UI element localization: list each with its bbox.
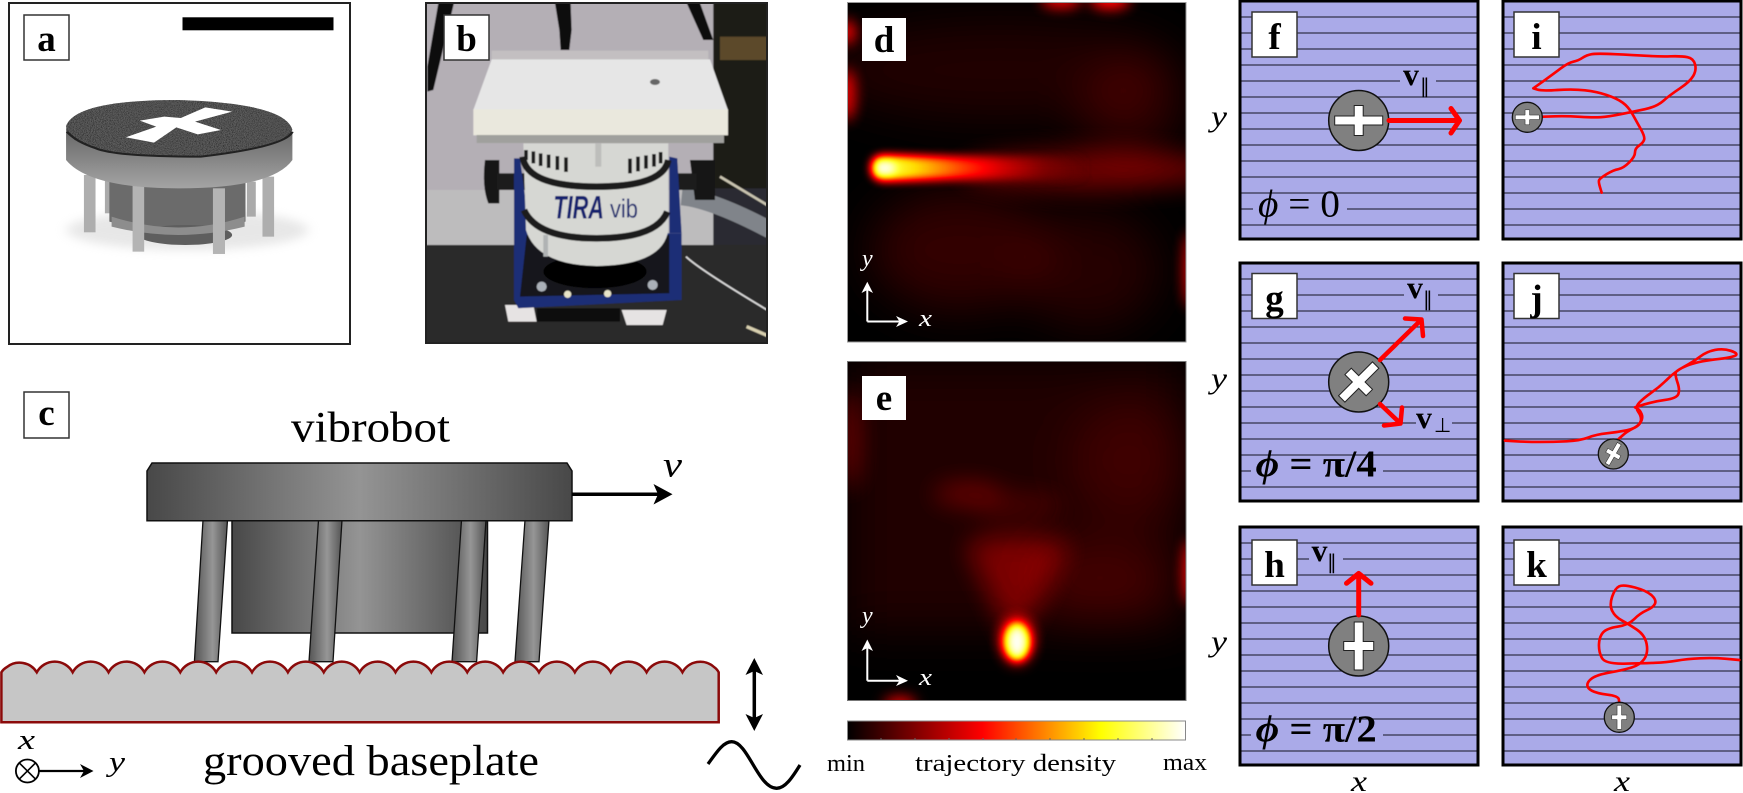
label a: [24, 15, 69, 60]
label g: g: [1265, 278, 1284, 320]
panel f: phi = 0: [1239, 1, 1479, 239]
velocity label h: v: [1312, 532, 1328, 568]
velocity label g parallel: v: [1407, 269, 1423, 305]
axes e: x: [918, 665, 932, 691]
vibrobot heading: vibrobot: [291, 405, 450, 452]
vibrobot body: [147, 463, 572, 662]
label b: [444, 15, 489, 60]
colour bar labels: trajectory density: [915, 751, 1116, 777]
arrow h: [1346, 574, 1371, 615]
robot k: [1604, 702, 1634, 732]
trajectory i: [1533, 54, 1696, 193]
label j: [1514, 274, 1559, 320]
axis labels y: y: [1207, 362, 1228, 395]
panel g: phi = pi/4: [1239, 263, 1479, 501]
velocity label g parallel: [1407, 269, 1433, 311]
axis labels y: y: [1207, 625, 1228, 658]
velocity label f: ∥: [1420, 74, 1430, 98]
label e: [862, 376, 906, 420]
phi label h: ϕ = π/2: [1256, 709, 1377, 751]
velocity label f: [1403, 56, 1430, 98]
coordinate axes x y: x: [17, 725, 36, 756]
logo text: [554, 196, 638, 219]
logo text: TIRA: [553, 189, 604, 225]
arrow: vertical vibration: [746, 658, 763, 731]
panel c: schematic of vibrobot on baseplate: [1, 392, 800, 788]
axes e: [860, 603, 932, 691]
panel k: trajectory: [1502, 527, 1742, 765]
velocity label g perpendicular: v: [1416, 399, 1432, 435]
panel b: photo of shaker setup: [426, 3, 770, 345]
trajectory k: [1587, 586, 1739, 703]
coordinate axes x y: y: [105, 747, 126, 778]
label d: [862, 18, 906, 61]
label h: h: [1264, 545, 1285, 586]
scale bar: [182, 17, 334, 30]
label k: k: [1526, 545, 1547, 586]
velocity label f: v: [1403, 56, 1419, 92]
robot j: [1598, 439, 1628, 469]
label f: f: [1268, 17, 1281, 58]
arrow g parallel: [1380, 318, 1423, 360]
axis labels y: y: [1207, 100, 1228, 133]
panel a: photo of vibrobot: [9, 3, 350, 344]
robot g: [1329, 352, 1389, 412]
label b: b: [456, 19, 477, 60]
velocity label h: ∥: [1327, 550, 1337, 574]
panel j: trajectory: [1502, 263, 1742, 501]
panel e: heat map: [841, 361, 1195, 711]
colour bar labels: max: [1163, 750, 1207, 776]
label i: [1514, 12, 1559, 58]
axes e: y: [860, 603, 873, 629]
robot f: [1329, 90, 1389, 150]
label i: i: [1531, 17, 1542, 58]
phi label g: ϕ = π/4: [1256, 444, 1377, 486]
label e: e: [876, 378, 892, 419]
icon: sine wave: [708, 742, 800, 788]
arrow g perpendicular: [1380, 404, 1402, 426]
logo text: vib: [610, 194, 638, 224]
arrow: velocity v: v: [663, 445, 682, 485]
label c: c: [38, 393, 55, 434]
panel h: phi = pi/2: [1239, 527, 1479, 765]
velocity label g perpendicular: ⊥: [1434, 413, 1451, 437]
label a: a: [37, 19, 56, 60]
colour bar labels: [827, 750, 1207, 777]
panel d: heat map: [847, 2, 1186, 342]
velocity label g parallel: ∥: [1423, 287, 1433, 311]
axes d: [860, 246, 932, 332]
axis labels y: [1207, 100, 1228, 658]
robot i: [1512, 102, 1542, 132]
label c: [24, 392, 69, 438]
arrow: velocity v: [572, 445, 682, 504]
grooved baseplate shape: [1, 662, 719, 722]
velocity label g perpendicular: [1416, 399, 1451, 437]
axis labels x: [1350, 765, 1631, 793]
velocity label h: [1312, 532, 1337, 574]
axes d: x: [918, 306, 932, 332]
label h: [1252, 540, 1297, 586]
colour bar legend: [827, 721, 1207, 777]
phi label f: ϕ = 0: [1258, 184, 1340, 226]
panel i: trajectory: [1502, 1, 1742, 239]
label k: [1514, 540, 1559, 586]
colour bar labels: min: [827, 751, 865, 777]
trajectory j: [1505, 349, 1736, 442]
robot h: [1329, 616, 1389, 676]
axes d: y: [860, 246, 873, 272]
grooved baseplate label: grooved baseplate: [203, 738, 539, 785]
coordinate axes x y: [16, 725, 126, 782]
label j: j: [1529, 278, 1543, 320]
label d: d: [874, 20, 895, 61]
arrow f: [1389, 108, 1460, 133]
label g: [1252, 274, 1297, 320]
label f: [1252, 12, 1297, 58]
